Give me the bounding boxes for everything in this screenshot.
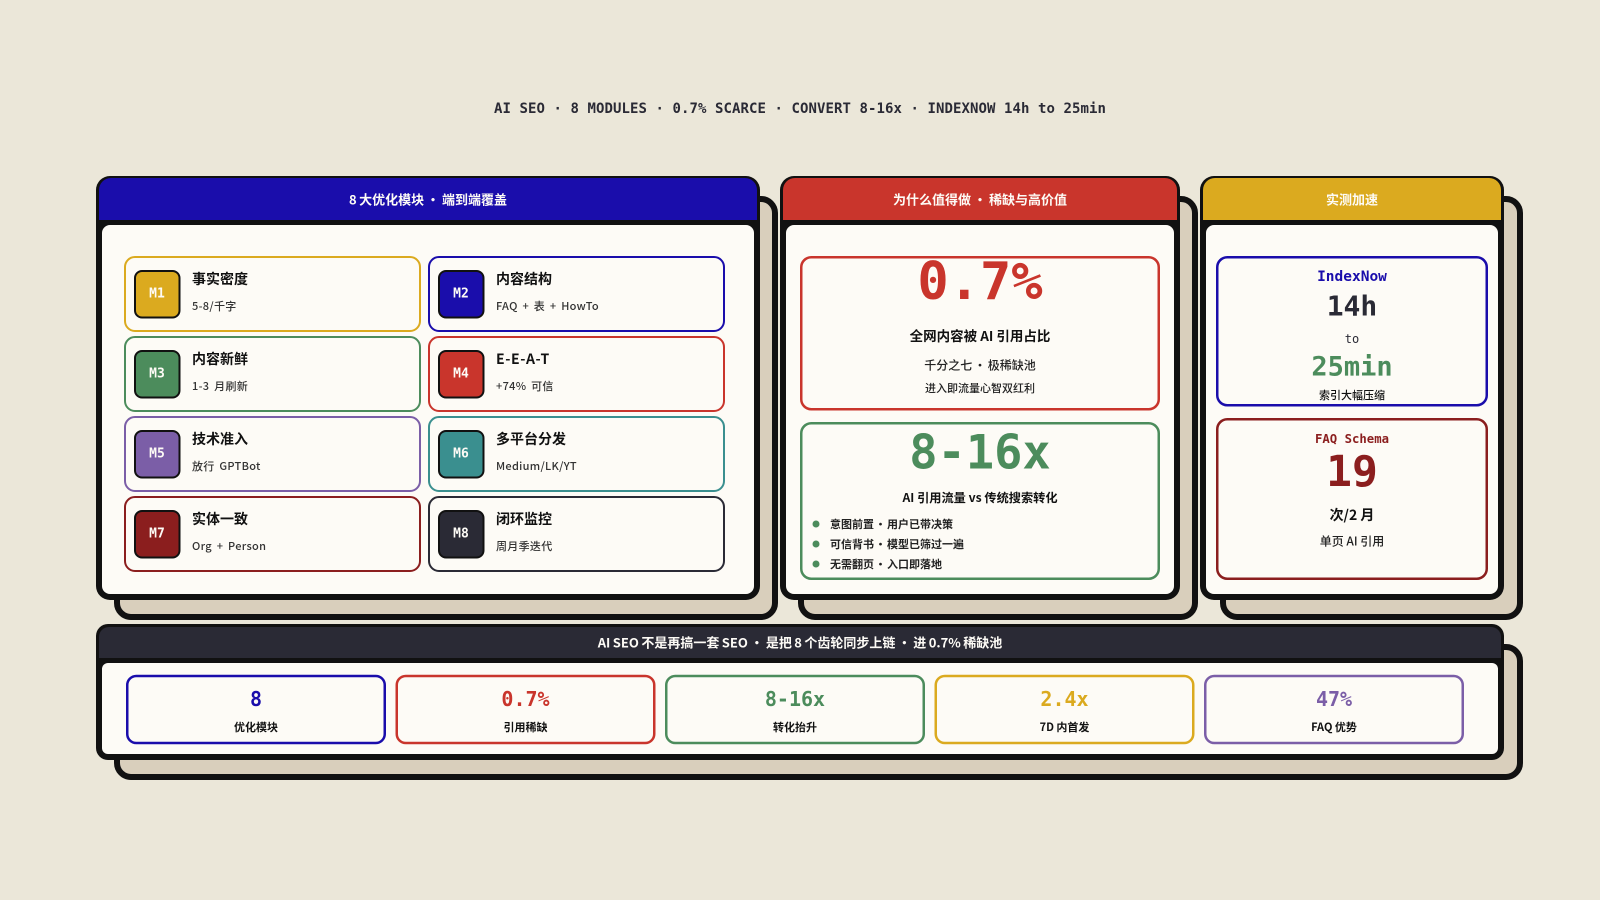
- callout: 8-16x conversion: 8-16x: [909, 426, 1051, 480]
- module M1: [125, 257, 420, 331]
- callout: 8-16x conversion: AI 引用流量 vs 传统搜索转化: [901, 488, 1058, 506]
- callout: 0.7% scarce: 进入即流量心智双红利: [925, 380, 1035, 396]
- module M6: [429, 417, 724, 491]
- callout: IndexNow: 索引大幅压缩: [1319, 387, 1385, 403]
- subtitle line: AI SEO · 8 MODULES · 0.7% SCARCE · CONVERT 8-16x · INDEXNOW 14h to 25min: [494, 101, 1106, 117]
- module M6: Medium/LK/YT: [496, 458, 577, 474]
- stat: 0.7%: 0.7%: [501, 687, 550, 711]
- module M6: M6: [453, 446, 469, 462]
- module M5: 技术准入: [192, 429, 248, 449]
- module M4: +74% 可信: [496, 378, 554, 394]
- panel: 8 modules: [96, 176, 775, 617]
- stat: 47%: FAQ 优势: [1311, 719, 1357, 735]
- module M7: Org + Person: [192, 538, 266, 554]
- stat: 8 modules: 优化模块: [234, 719, 278, 735]
- module M1: 5-8/千字: [192, 298, 237, 314]
- callout: 0.7% scarce: [801, 252, 1159, 409]
- module M5: 放行 GPTBot: [192, 458, 261, 474]
- heading: speed: 实测加速: [1326, 190, 1378, 208]
- stat: 47%: [1205, 676, 1463, 743]
- panel: measured speed: [1200, 176, 1520, 617]
- callout: 8-16x conversion: [801, 423, 1159, 579]
- module M7: 实体一致: [192, 509, 248, 529]
- heading: summary: AI SEO 不是再搞一套 SEO · 是把 8 个齿轮同步上链 · 进 0.7% 稀缺池: [597, 632, 1002, 652]
- callout: 0.7% scarce: 0.7%: [917, 252, 1043, 312]
- callout: FAQ Schema: FAQ Schema: [1315, 432, 1389, 446]
- callout: FAQ Schema: 单页 AI 引用: [1320, 532, 1384, 550]
- panel: summary strip: [96, 624, 1520, 777]
- module M2: M2: [453, 286, 469, 302]
- module M2: [429, 257, 724, 331]
- module M3: 内容新鲜: [192, 349, 248, 369]
- module M8: 周月季迭代: [496, 538, 552, 554]
- stat: 8 modules: 8: [250, 687, 262, 711]
- callout: IndexNow: [1217, 257, 1487, 405]
- module M2: FAQ + 表 + HowTo: [496, 298, 599, 314]
- module M3: [125, 337, 420, 411]
- stat: 0.7%: [397, 676, 654, 743]
- module M3: 1-3 月刷新: [192, 378, 248, 394]
- heading: modules: 8 大优化模块 · 端到端覆盖: [349, 190, 507, 208]
- module M1: M1: [149, 286, 165, 302]
- reason list: [812, 516, 964, 572]
- heading: why: 为什么值得做 · 稀缺与高价值: [893, 190, 1067, 208]
- stat: 8-16x: 转化抬升: [773, 719, 817, 735]
- callout: FAQ Schema: 19: [1326, 447, 1378, 497]
- module M8: [429, 497, 724, 571]
- callout: IndexNow: to: [1345, 332, 1359, 346]
- stat: 2.4x: 2.4x: [1040, 687, 1089, 711]
- stat: 2.4x: 7D 内首发: [1040, 719, 1089, 735]
- module M4: [429, 337, 724, 411]
- panel: why worth it: [780, 176, 1195, 617]
- module M7: M7: [149, 526, 165, 542]
- module M7: [125, 497, 420, 571]
- callout: FAQ Schema: 次/2 月: [1330, 505, 1374, 525]
- stat: 8-16x: 8-16x: [765, 687, 825, 711]
- callout: IndexNow: IndexNow: [1317, 269, 1387, 285]
- module M1: 事实密度: [192, 269, 248, 289]
- stat: 8 modules: [127, 676, 385, 743]
- stat: 2.4x: [936, 676, 1193, 743]
- module M5: [125, 417, 420, 491]
- stat: 47%: 47%: [1316, 687, 1352, 711]
- callout: 0.7% scarce: 千分之七 · 极稀缺池: [924, 356, 1036, 374]
- callout: IndexNow: 25min: [1311, 352, 1393, 382]
- module M4: M4: [453, 366, 469, 382]
- module M5: M5: [149, 446, 165, 462]
- stat: 0.7%: 引用稀缺: [504, 719, 548, 735]
- reason list: 可信背书 · 模型已筛过一遍: [830, 536, 964, 552]
- reason list: 意图前置 · 用户已带决策: [830, 516, 953, 532]
- module M2: 内容结构: [496, 269, 552, 289]
- callout: IndexNow: 14h: [1327, 290, 1377, 322]
- stat: 8-16x: [666, 676, 924, 743]
- module M6: 多平台分发: [496, 429, 566, 449]
- module M3: M3: [149, 366, 165, 382]
- callout: FAQ Schema: [1217, 419, 1487, 579]
- module M8: M8: [453, 526, 469, 542]
- reason list: 无需翻页 · 入口即落地: [830, 556, 942, 572]
- module M4: E-E-A-T: [496, 349, 550, 369]
- callout: 0.7% scarce: 全网内容被 AI 引用占比: [910, 325, 1050, 345]
- module M8: 闭环监控: [496, 509, 552, 529]
